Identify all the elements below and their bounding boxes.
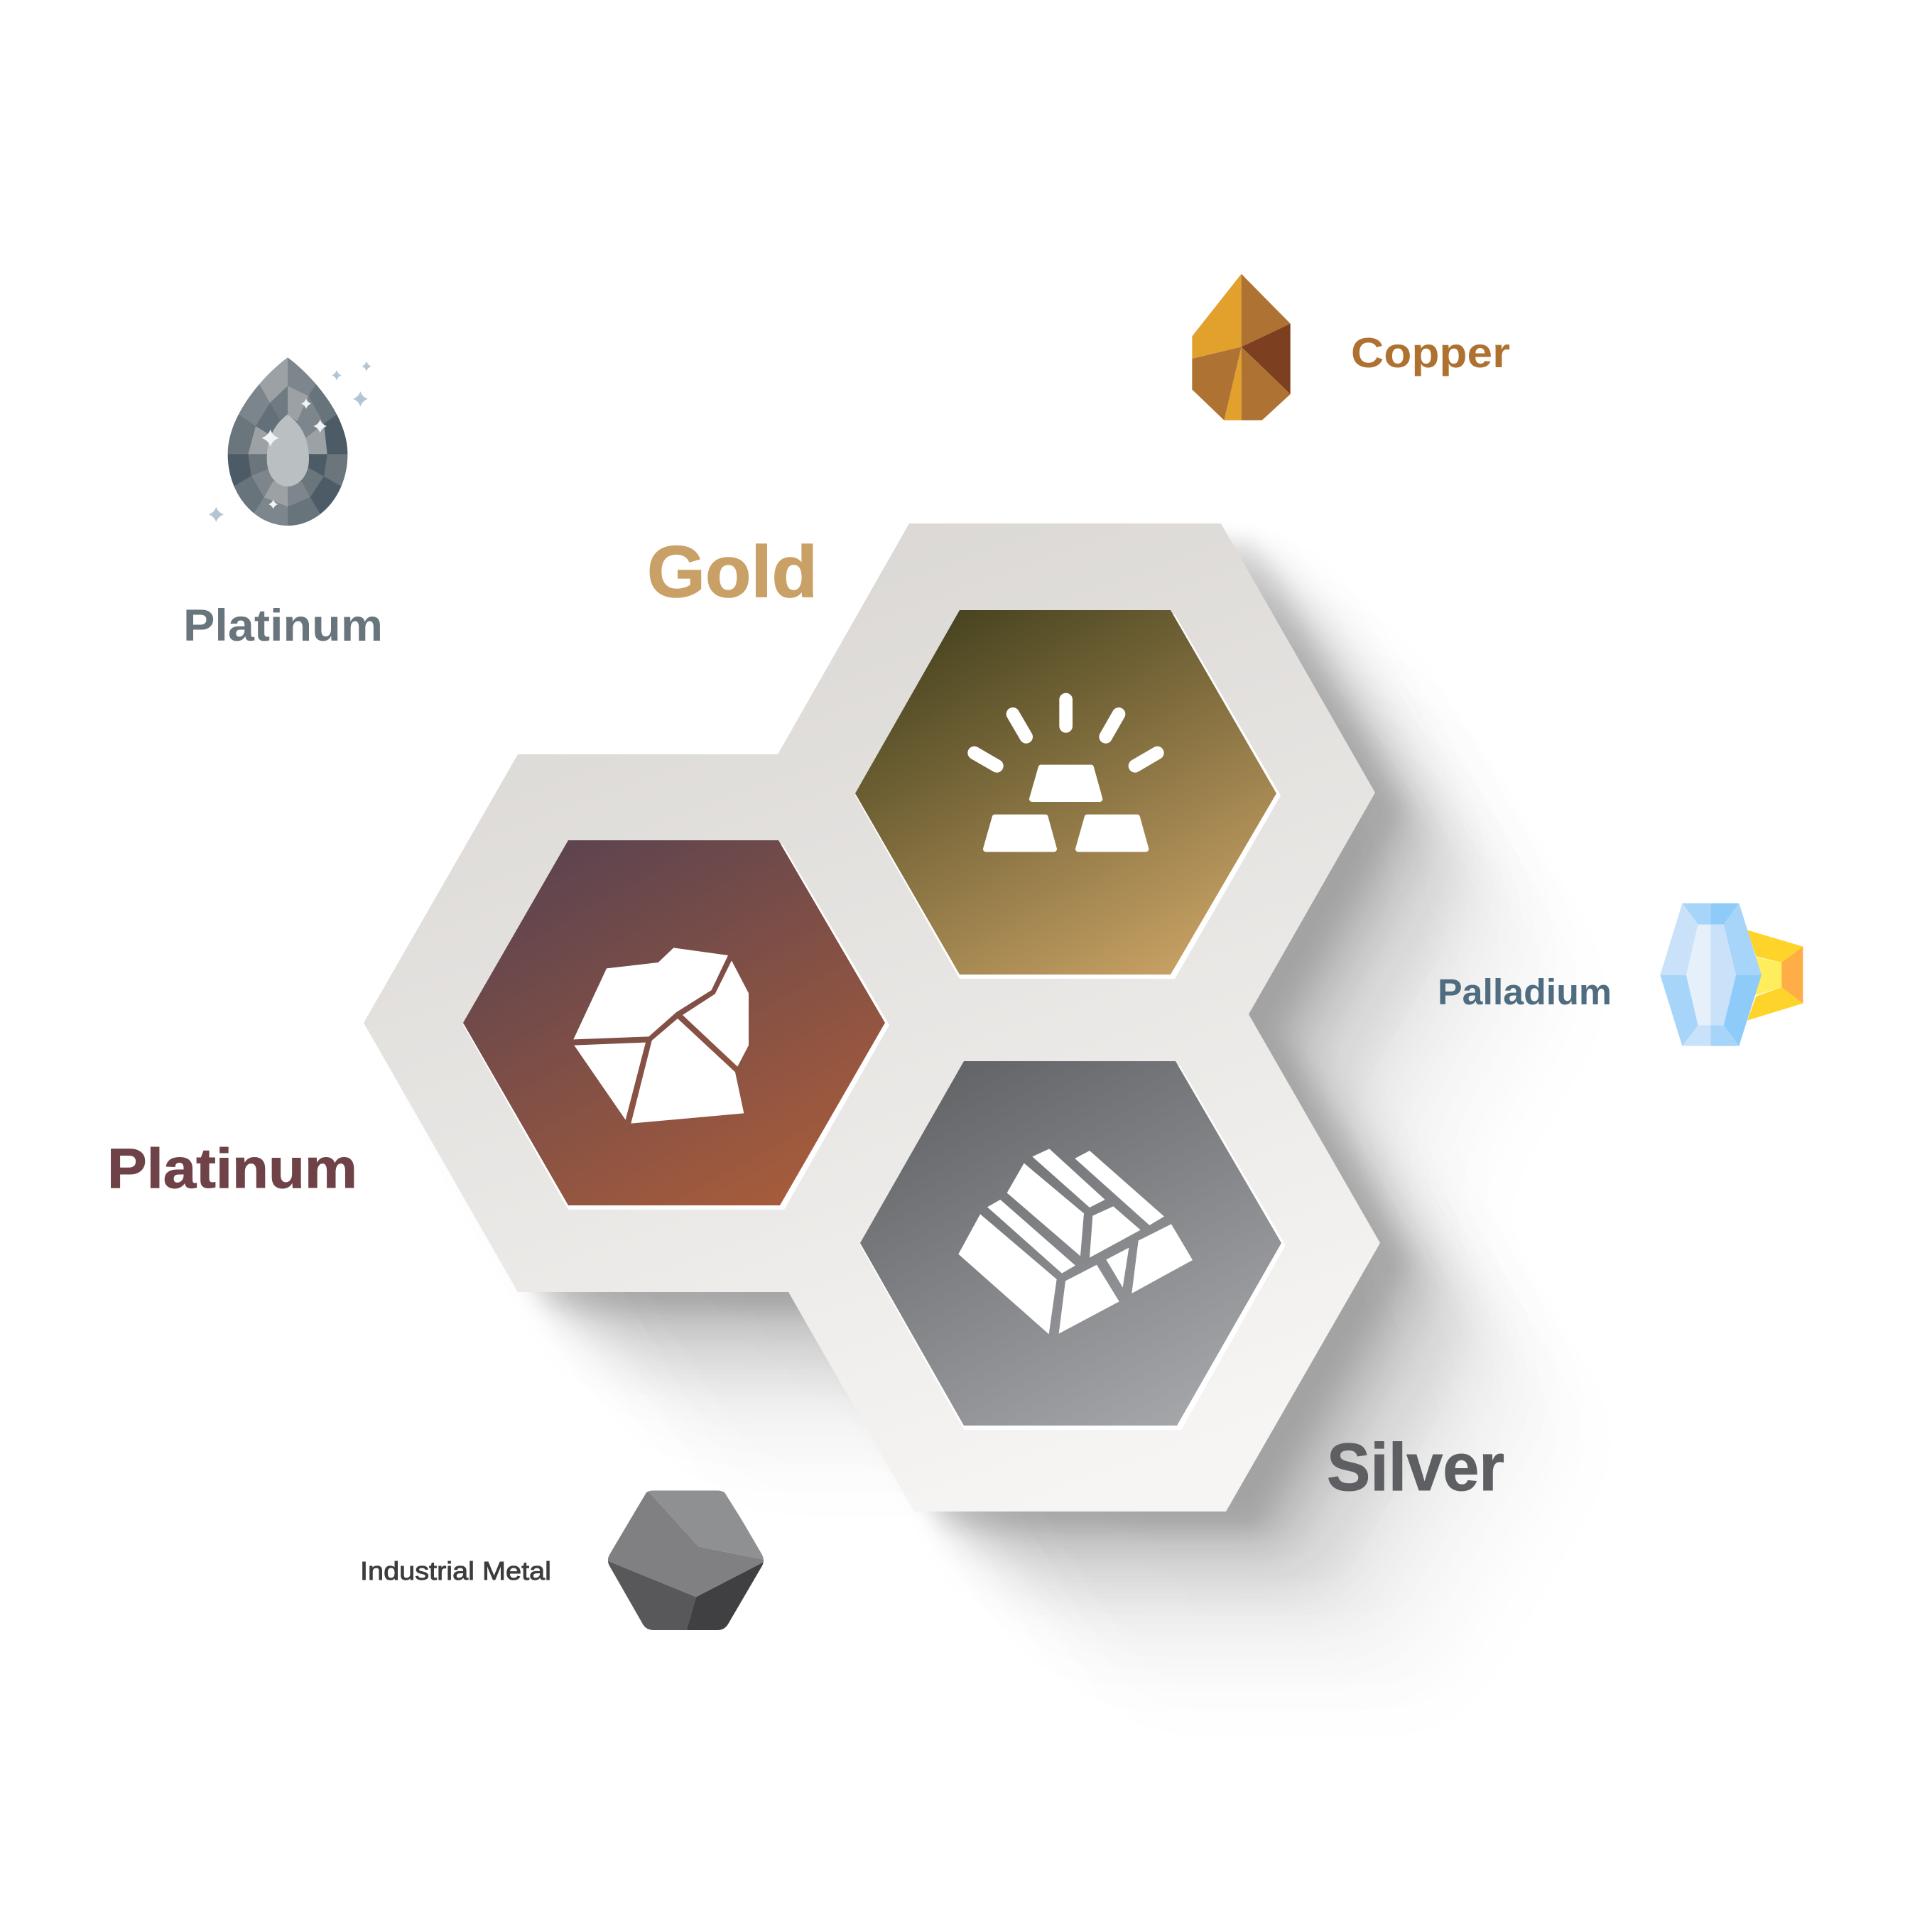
icon: ore rock [573,948,749,1124]
honeycomb frame [364,523,1380,1512]
icon: gold bars [975,700,1157,849]
label: Palladium: Palladium [1438,972,1612,1012]
panel: platinum hexagon [463,840,889,1210]
panel: silver hexagon [860,1061,1286,1430]
label: Industrial Metal: Industrial Metal [360,1556,551,1585]
icon: platinum gem [209,353,371,531]
icon: industrial metal gem [606,1490,767,1632]
icon: copper gem [1192,274,1291,420]
label: Copper: Copper [1351,330,1510,376]
icon: silver bars [958,1149,1193,1334]
heading: Platinum: Platinum [107,1136,357,1200]
heading: Gold: Gold [647,531,818,612]
heading: Silver: Silver [1327,1430,1504,1505]
icon: palladium gem [1660,903,1803,1046]
label: Platinum: Platinum [183,601,383,651]
panel: gold hexagon [855,610,1281,979]
honeycomb drop shadow [394,539,1600,1710]
